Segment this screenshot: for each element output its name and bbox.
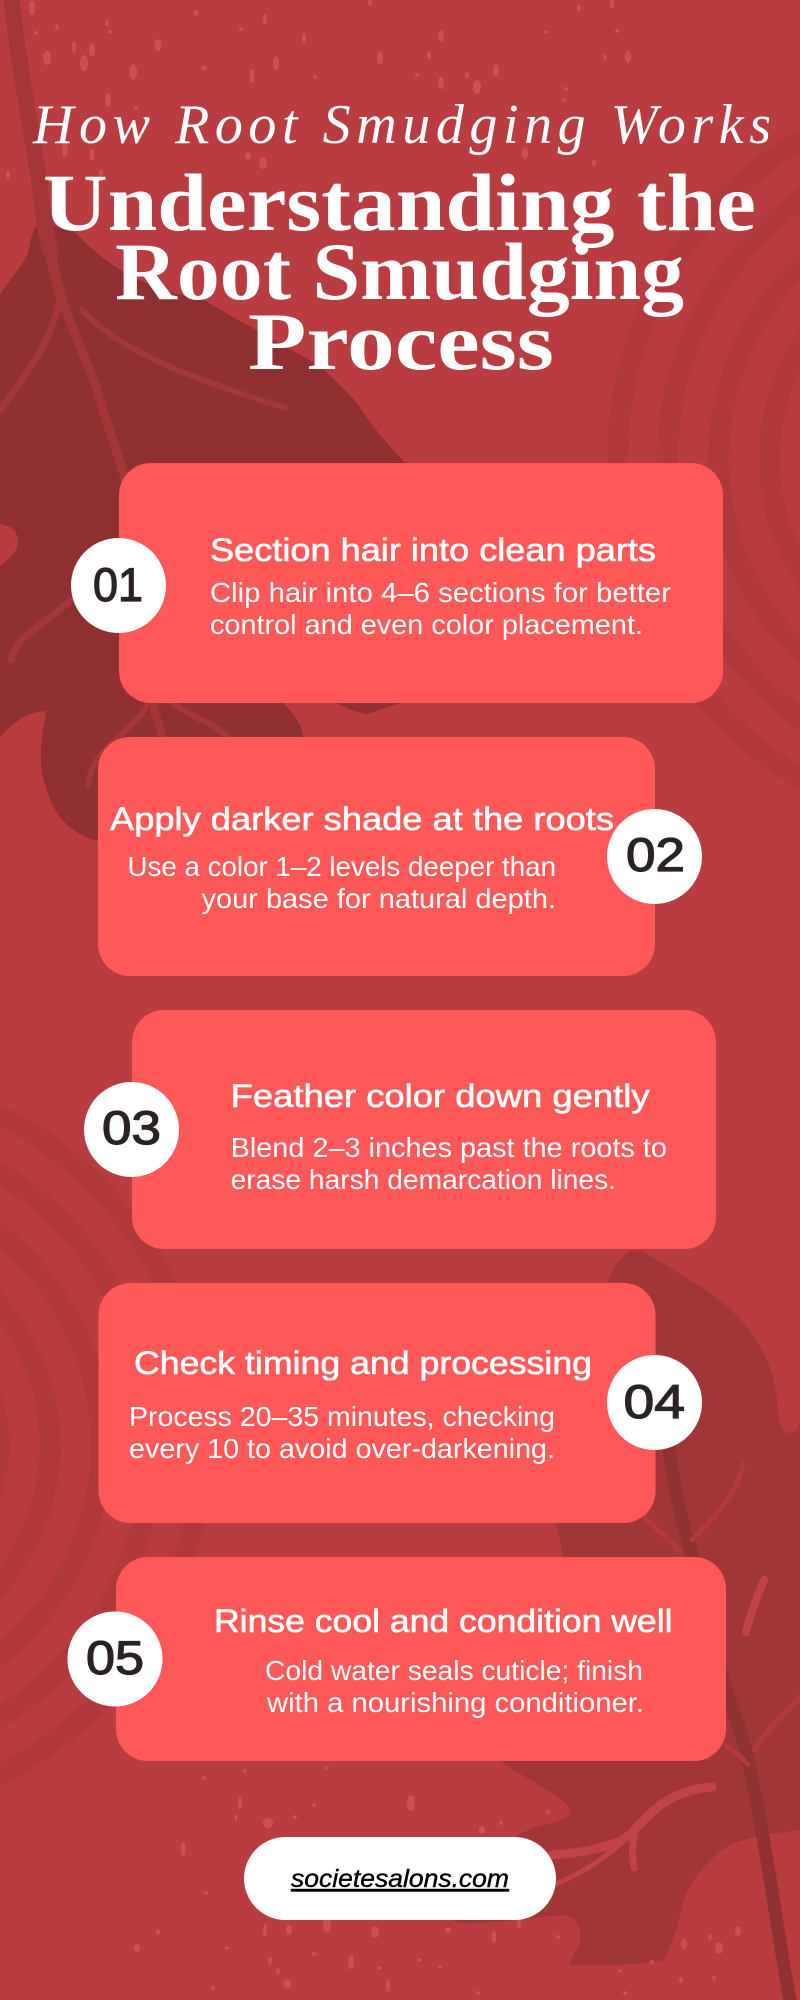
- step 1 badge: [71, 538, 166, 633]
- step 4 panel: [98, 1283, 702, 1523]
- step 3 badge: 03: [102, 1101, 161, 1154]
- main title: [43, 157, 756, 387]
- step 3 text: erase harsh demarcation lines.: [231, 1164, 616, 1195]
- step 1 text: Clip hair into 4–6 sections for better: [210, 577, 671, 608]
- step 3 panel: [84, 1010, 716, 1249]
- main title: Root Smudging: [115, 226, 684, 317]
- step 2 badge: 02: [626, 828, 685, 881]
- step 5 card: [116, 1557, 726, 1761]
- step 1 card: [119, 463, 723, 703]
- step 5 panel: [68, 1557, 726, 1761]
- step 4 badge: [607, 1355, 702, 1450]
- main title: Understanding the: [43, 157, 756, 248]
- step 2 text: your base for natural depth.: [202, 883, 556, 914]
- step 2 heading: Apply darker shade at the roots: [110, 801, 614, 837]
- step 3 text: [231, 1132, 667, 1195]
- step 2 text: Use a color 1–2 levels deeper than: [128, 851, 556, 882]
- decorative leaf: bottom right: [454, 1250, 800, 2000]
- step 1 text: [210, 577, 671, 640]
- eyebrow: script subtitle: How Root Smudging Works: [32, 94, 771, 156]
- main title: Process: [248, 296, 554, 387]
- step 2 panel: [98, 737, 702, 976]
- step 1 badge: 01: [93, 558, 143, 611]
- step 3 badge: [84, 1082, 179, 1177]
- step 4 badge: 04: [624, 1375, 685, 1428]
- step 1 heading: Section hair into clean parts: [210, 532, 656, 568]
- website pill: [244, 1837, 556, 1920]
- step 4 card: [98, 1283, 656, 1523]
- step 3 heading: Feather color down gently: [231, 1078, 650, 1114]
- step 5 badge: [68, 1612, 162, 1706]
- step 5 text: with a nourishing conditioner.: [266, 1687, 644, 1718]
- decorative leaf: top left: [0, 0, 430, 841]
- website pill: societesalons.com: [291, 1865, 509, 1893]
- step 2 card: [98, 737, 655, 976]
- step 1 panel: [71, 463, 723, 703]
- step 5 text: Cold water seals cuticle; finish: [265, 1655, 643, 1686]
- step 4 text: [129, 1401, 555, 1464]
- step 2 badge: [607, 809, 702, 904]
- step 1 text: control and even color placement.: [210, 609, 643, 640]
- step 2 text: [128, 851, 556, 914]
- step 4 text: every 10 to avoid over-darkening.: [129, 1433, 555, 1464]
- step 3 text: Blend 2–3 inches past the roots to: [231, 1132, 667, 1163]
- step 5 heading: Rinse cool and condition well: [214, 1603, 672, 1639]
- step 3 card: [132, 1010, 716, 1249]
- step 5 badge: 05: [86, 1631, 144, 1684]
- step 4 text: Process 20–35 minutes, checking: [129, 1401, 555, 1432]
- step 4 heading: Check timing and processing: [134, 1345, 592, 1381]
- step 5 text: [265, 1655, 644, 1718]
